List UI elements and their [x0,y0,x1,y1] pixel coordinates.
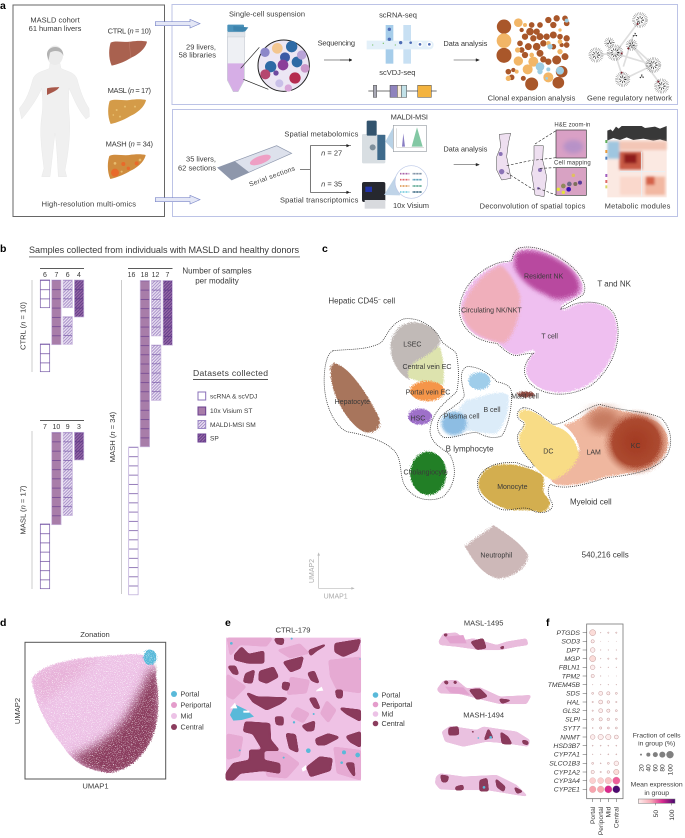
plasma cell cluster [441,411,467,435]
cluster labels [335,274,641,560]
legend: datasets collected: scRNA & scVDJ [210,394,257,400]
mast cell cluster [517,391,535,397]
MASL header numbers: 9 [66,424,70,431]
label c: c [322,243,328,255]
plot frame [587,624,623,799]
MASL group [18,420,84,589]
CTRL stacks [40,280,84,372]
legend e: Mid [382,710,393,718]
cluster labels: Cholangiocyte [404,469,448,476]
top workflow box [172,4,678,104]
resident NK cluster [514,250,580,299]
cohort heading: MASLD cohort [30,15,81,24]
chart: clonal expansion circles [497,16,569,90]
colour legend: 100 [669,809,676,821]
slide sections label: 35 livers, [186,155,216,164]
data analysis label (bottom): Data analysis [443,145,488,154]
gene labels: FBLN1 [559,665,580,672]
UMAP clusters [331,250,669,578]
caption: clonal expansion analysis: Clonal expansion analysis [488,94,576,103]
outline: myeloid [477,404,671,513]
legend d [171,690,212,732]
slide sections label [178,155,216,173]
gene labels: HAL [567,699,580,706]
MASL axis [32,431,33,589]
gene labels [548,630,581,794]
gene labels: SDS [566,691,580,698]
cluster labels: Neutrophil [480,553,513,560]
KC cluster [603,409,669,476]
bottom workflow box [172,110,678,216]
data analysis label (top): Data analysis [443,39,488,48]
size legend: 60 [653,764,660,772]
MASL-1495 section 2 [437,680,532,704]
chart: gene regulatory network [590,14,668,92]
arrow: to top workflow [155,19,200,28]
MASH liver: MASH (n = 34) [106,139,153,148]
gene labels: TMEM45B [548,682,580,689]
legend d: Portal [180,690,200,698]
cohort contents [19,9,359,208]
group labels: Mid [606,806,613,817]
spatial transcriptomics label: Spatial transcriptomics [280,195,359,204]
MASH-1494 section 1 [442,726,530,747]
colour legend: Mean expression [631,782,683,789]
CTRL-179 spatial map [226,638,361,781]
MASL header numbers: 3 [77,424,81,431]
cohort heading: 61 human livers [29,24,82,33]
MASH header numbers: 16 [128,272,135,279]
caption: gene regulatory network: Gene regulatory network [587,94,672,103]
MASH label: MASH (n = 34) [108,411,117,462]
n = 35 label: n = 35 [321,179,342,188]
group label: B lymphocyte: B lymphocyte [446,444,494,453]
MASH header numbers: 18 [141,272,148,279]
outline: hepatic [324,319,458,500]
MASL liver [108,86,151,124]
portal zone [143,650,157,665]
caption: high-resolution multi-omics: High-resolution multi-omics [42,199,136,208]
cluster labels: Monocyte [497,484,528,491]
CTRL header numbers: 4 [77,272,81,279]
outline: T and NK [459,247,618,394]
circulating NK/NKT cluster [462,266,520,343]
CTRL header numbers: 6 [66,272,70,279]
icon: tube [227,25,248,92]
cell mapping label: Cell mapping [554,161,591,167]
group label: hepatic: − [378,297,381,303]
UMAP axes [309,552,355,600]
central vein EC cluster [403,347,444,385]
MASH header numbers: 7 [166,272,170,279]
gene labels: SYT7 [563,725,580,732]
icon: human figure [19,46,89,177]
group label: hepatic: Hepatic CD45 [328,296,378,305]
axis ticks [583,633,616,802]
legend e: Portal [382,690,401,700]
gene labels: PTGDS [556,630,580,637]
group label: hepatic: cell [381,296,395,305]
axis labels: UMAP1 [82,782,109,790]
tissue gaps [230,687,323,772]
zonation title: Zonation [80,630,110,639]
icon: 10x Visium instrument [362,166,429,210]
LSEC cluster [391,322,440,380]
icon: MALDI-MSI instrument [362,112,428,163]
T cell cluster [461,250,617,393]
gene labels: DPT [566,647,581,654]
UMAP axes: UMAP2 [309,559,316,583]
label b: b [0,243,6,255]
arrow: data analysis top [454,59,479,61]
zonation scatter [32,650,160,777]
cluster labels: LSEC [403,341,421,348]
colour legend [631,782,683,821]
cohort box [13,5,164,216]
central spots [227,639,360,779]
livers and libraries label: 29 livers, [186,42,216,51]
spatial metabolomics label: Spatial metabolomics [284,130,359,139]
panel e [225,617,532,797]
mid zone [32,654,158,773]
size legend: Fraction of cells [633,732,681,739]
MASH-1494 title: MASH-1494 [463,710,504,719]
HSC cluster [408,409,432,425]
arrow: to bottom workflow [155,195,200,204]
label f: f [546,617,550,629]
MASH group [108,268,172,595]
gene labels: MGP [564,656,580,663]
arrow tips to modalities [340,144,349,194]
legend: datasets collected: SP [210,436,219,442]
legend: datasets collected: Datasets collected [193,368,268,378]
periportal patches [227,638,361,781]
MASH stacks [129,280,172,595]
label a: a [0,0,6,12]
CTRL liver: CTRL (n = 10) [108,26,151,35]
group labels [590,806,621,835]
cluster labels: Central vein EC [403,364,451,371]
caption: deconvolution of spatial topics: Deconvolution of spatial topics [480,201,586,210]
cohort heading [29,15,82,33]
MASL liver: MASL (n = 17) [108,86,151,95]
MASL-1495 section 1 [438,633,528,650]
group labels: Central [614,806,621,828]
hepatocyte cluster [331,363,380,433]
sequencing arrow tip [340,59,352,61]
gene labels: CYP1A2 [554,769,580,776]
size legend: 100 [667,764,674,775]
gene labels: CYP7A1 [554,752,580,759]
label d: d [0,617,6,629]
legend e: Central [382,719,405,728]
colour legend: in group [644,790,669,797]
chart: metabolic modules heatmap [605,126,667,197]
icon: scVDJ-seq construct: scVDJ-seq [379,68,415,77]
cluster labels: Plasma cell [444,413,480,420]
gene labels: SLPI [565,717,580,724]
UMAP axes: UMAP1 [324,593,348,600]
number of samples label: per modality [195,276,239,286]
legend e [373,690,413,728]
CTRL axis [32,280,33,372]
number of samples label: Number of samples [182,266,252,276]
upper B lymphocyte cluster [468,372,490,390]
cluster labels: KC [631,443,641,450]
DC cluster [519,410,579,480]
group label: myeloid: Myeloid cell [570,497,612,506]
gene labels: SOD3 [561,639,580,646]
icon: scRNA-seq chip: scRNA-seq [379,11,417,20]
MASL header numbers [40,420,84,431]
colour legend: 50 [653,810,660,817]
periportal zone [32,657,92,700]
cluster labels: Circulating NK/NKT [461,308,522,315]
MASL label: MASL (n = 17) [18,485,28,534]
dots: low expression [590,630,619,775]
size legend: 20 [638,764,645,772]
gene labels: GLS2 [563,708,580,715]
axis labels [13,698,109,790]
size legend: 80 [660,764,667,772]
panel a [0,0,678,216]
gene labels: TPM2 [562,673,580,680]
legend d: Central [180,722,204,732]
size legend [633,732,681,775]
legend: datasets collected: MALDI-MSI SM [210,422,256,429]
panel b [0,243,300,595]
UMAP frame [25,642,166,779]
H&amp;E zoom-in label: H&E zoom-in [554,122,590,128]
cluster labels: T cell [541,334,558,341]
cluster labels: Mast cell [511,394,539,401]
portal spots [230,638,361,764]
MASH axis [121,280,122,594]
cluster labels: HSC [411,415,425,422]
icon: 10x Visium instrument: 10x Visium [393,201,429,210]
livers and libraries label: 58 libraries [179,51,216,60]
group labels: Portal [590,806,597,824]
icon: MALDI-MSI instrument: MALDI-MSI [391,112,428,121]
KC upper cluster [587,408,620,432]
gene labels: HSD3B7 [553,743,580,750]
central zone [71,668,160,777]
serial sections label: Serial sections [248,165,297,188]
gene labels: NNMT [560,734,581,741]
icon: scVDJ-seq construct [368,68,437,97]
heading b: Samples collected from individuals with MASLD and healthy donors [29,245,299,255]
cluster labels: DC [543,449,553,456]
cluster labels: Resident NK [524,274,564,281]
number of samples label [182,266,252,286]
dot plot [548,624,683,835]
MASL stacks [40,432,84,589]
label e: e [225,617,231,629]
neutrophil cluster [465,525,528,578]
connector: branch to modalities [300,146,351,192]
panel f [546,617,683,835]
dots: high expression [589,777,620,793]
single-cell suspension label: Single-cell suspension [229,9,305,18]
outline: B lymphocyte [437,367,512,438]
legend: datasets collected [193,368,268,442]
icon: slide [218,146,292,180]
cell mapping image [556,168,586,195]
cell count: 540,216 cells [582,551,629,560]
gene labels: SLCO1B3 [549,761,580,768]
CTRL header numbers: 7 [54,272,58,279]
cluster labels: Portal vein EC [406,389,450,396]
CTRL header numbers [40,268,84,279]
gene labels: CYP3A4 [554,778,580,785]
size legend: 40 [646,764,653,772]
group labels: Periportal [598,806,605,835]
MASH liver [106,139,153,179]
cluster labels: Hepatocyte [335,399,370,406]
sequencing label: Sequencing [318,39,355,48]
legend: datasets collected: 10x Visium ST [210,408,252,415]
CTRL header numbers: 6 [43,272,47,279]
caption: metabolic modules: Metabolic modules [605,201,671,210]
MASH header numbers [128,268,172,279]
gene labels: CYP2E1 [554,787,580,794]
icon: tissue sections with zoom [497,131,556,197]
slide sections label: 62 sections [178,164,216,173]
H&amp;E zoom-in image [556,130,586,158]
size legend: in group (%) [638,741,675,748]
axis labels: UMAP2 [13,698,22,724]
legend d: Periportal [180,700,212,710]
MASL header numbers: 7 [43,424,47,431]
arrow: data analysis bottom [454,163,479,166]
cluster labels: B cell [483,407,501,414]
MASH-1494 section 2 [435,773,528,797]
B cell cluster [457,393,509,434]
small tissue sections [435,619,532,797]
MASL-1495 title: MASL-1495 [464,619,503,628]
n = 27 label: n = 27 [321,149,342,158]
MASL header numbers: 10 [53,424,60,431]
MASH header numbers: 12 [152,272,159,279]
cholangiocyte cluster [410,452,446,495]
heading rule [29,256,300,257]
arrow: sequencing [324,59,350,61]
cluster labels: LAM [586,449,601,456]
top workflow right contents [340,11,672,210]
LAM cluster [550,407,668,485]
legend e: Periportal [382,700,413,709]
group label: T and NK: T and NK [597,279,632,288]
panel c [309,243,671,600]
icon: cell magnification [241,40,309,92]
legend d: Mid [180,712,192,720]
icon: scRNA-seq chip [367,11,434,64]
portal vein EC cluster [410,381,445,401]
CTRL-179 title: CTRL-179 [275,626,311,634]
CTRL group [18,268,84,372]
monocyte cluster [478,464,550,512]
panel d [0,617,212,790]
livers and libraries label [179,42,216,60]
CTRL label: CTRL (n = 10) [18,302,28,350]
CTRL liver [108,26,151,66]
